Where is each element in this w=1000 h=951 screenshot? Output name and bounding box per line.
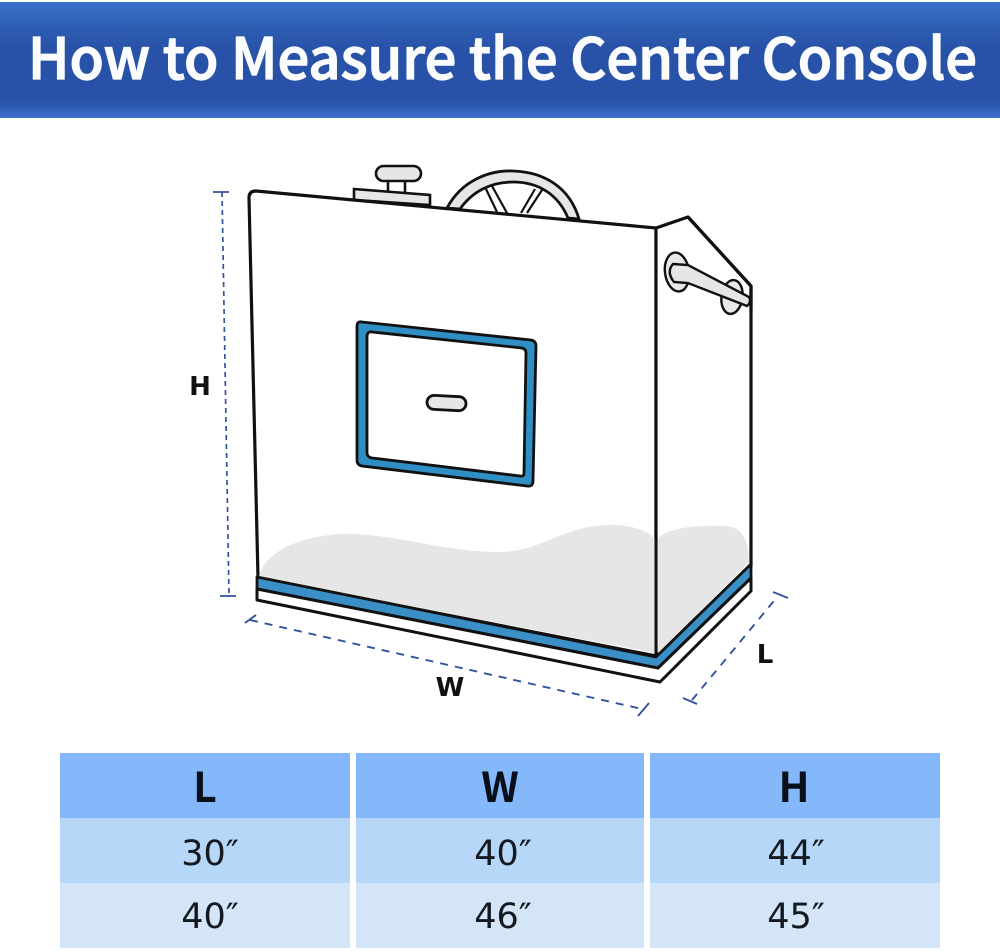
column L: L bbox=[193, 754, 217, 814]
column L bbox=[60, 753, 350, 948]
column L: 30″ bbox=[181, 834, 239, 874]
white plinth bbox=[257, 578, 751, 682]
icon: drawer handle bbox=[427, 395, 466, 411]
label L: L bbox=[757, 640, 773, 670]
title: How to Measure the Center Console bbox=[28, 14, 977, 96]
L dimension line bbox=[683, 592, 788, 704]
icon: grab handle bbox=[662, 251, 750, 315]
size table bbox=[60, 753, 940, 948]
column L: 40″ bbox=[181, 897, 239, 937]
icon: cleat on deck bbox=[354, 166, 430, 205]
console diagram bbox=[189, 166, 788, 716]
column W: 40″ bbox=[474, 834, 532, 874]
column H: 44″ bbox=[767, 834, 825, 874]
column H: H bbox=[778, 754, 810, 814]
grey shading: side bbox=[658, 526, 749, 654]
header banner bbox=[0, 2, 1000, 118]
label H: H bbox=[189, 372, 211, 402]
console front panel bbox=[249, 191, 656, 656]
label W: W bbox=[436, 673, 464, 703]
grey shading: front bbox=[259, 525, 655, 653]
column W bbox=[356, 753, 644, 948]
icon: steering wheel bbox=[447, 171, 579, 219]
blue base stripe bbox=[257, 564, 751, 668]
console side panel bbox=[656, 217, 751, 656]
column W: W bbox=[481, 754, 519, 814]
column H bbox=[650, 753, 940, 948]
W dimension line bbox=[245, 615, 649, 716]
H dimension line bbox=[213, 192, 236, 596]
column H: 45″ bbox=[767, 897, 825, 937]
column W: 46″ bbox=[474, 897, 532, 937]
hatch drawer bbox=[357, 322, 536, 486]
